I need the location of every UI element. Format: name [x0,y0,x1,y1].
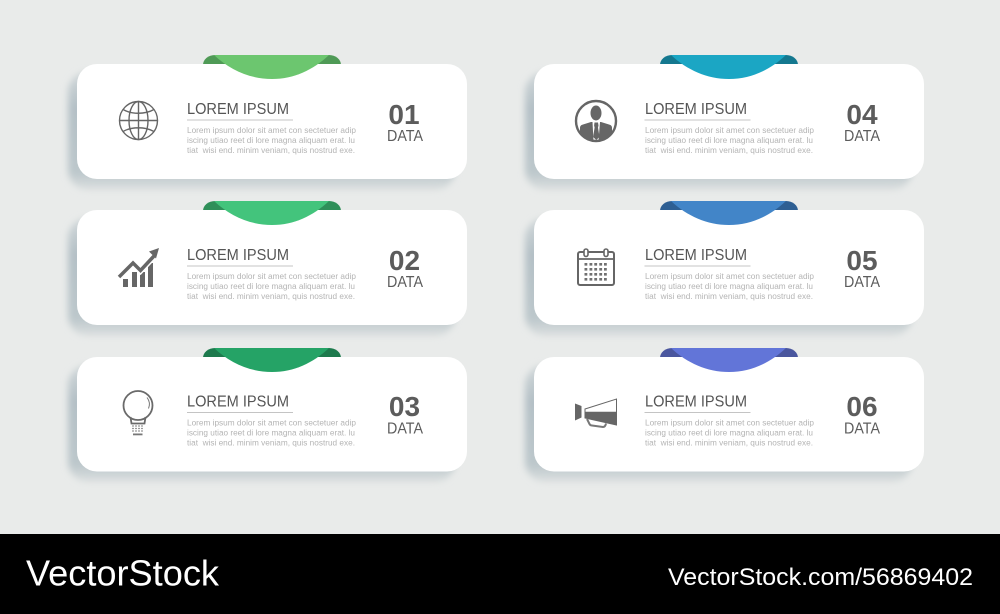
text block [187,125,356,155]
label: DATA [387,420,423,438]
text block [187,271,356,301]
text block: tiat wisi end. minim veniam, quis nostrud exe. [645,438,813,448]
heading: LOREM IPSUM [187,394,289,410]
text block: iscing utiao reet di lore magna aliquam erat. lu [645,428,813,438]
text block: tiat wisi end. minim veniam, quis nostrud exe. [187,145,355,155]
text block [645,125,814,155]
panel: card 02 [68,201,467,336]
text block: Lorem ipsum dolor sit amet con sectetuer adip [187,418,356,428]
text block: tiat wisi end. minim veniam, quis nostrud exe. [187,438,355,448]
text block: Lorem ipsum dolor sit amet con sectetuer adip [187,125,356,135]
text block: iscing utiao reet di lore magna aliquam erat. lu [187,281,355,291]
text block: Lorem ipsum dolor sit amet con sectetuer adip [645,271,814,281]
icon: globe [120,102,158,140]
text block: iscing utiao reet di lore magna aliquam erat. lu [645,135,813,145]
footer bar [0,534,1000,614]
heading: LOREM IPSUM [645,394,747,410]
label: DATA [387,128,423,145]
number: 04 [846,99,878,130]
label: DATA [387,274,423,291]
panel: card 04 [525,55,924,190]
text block [645,271,814,301]
heading: LOREM IPSUM [187,247,289,264]
text block: Lorem ipsum dolor sit amet con sectetuer adip [187,271,356,281]
label: DATA [844,420,880,438]
icon: businessman [576,101,616,141]
text block [645,418,814,448]
icon: megaphone [575,399,616,427]
text block [187,418,356,448]
icon: light bulb [124,391,152,435]
text block: iscing utiao reet di lore magna aliquam erat. lu [187,428,355,438]
number: 01 [388,99,420,130]
text block: tiat wisi end. minim veniam, quis nostrud exe. [187,291,355,301]
text block: tiat wisi end. minim veniam, quis nostrud exe. [645,291,813,301]
text block: tiat wisi end. minim veniam, quis nostrud exe. [645,145,813,155]
heading: LOREM IPSUM [645,247,747,264]
number: 06 [846,391,878,422]
footer logo: VectorStock [26,552,220,594]
heading: LOREM IPSUM [187,101,289,118]
text block: iscing utiao reet di lore magna aliquam erat. lu [187,135,355,145]
number: 05 [846,245,878,276]
number: 03 [389,391,420,422]
panel: card 05 [525,201,924,336]
footer url: VectorStock.com/56869402 [668,564,973,591]
label: DATA [844,128,880,145]
text block: iscing utiao reet di lore magna aliquam erat. lu [645,281,813,291]
panel: card 06 [525,348,924,482]
icon: growth chart [119,248,159,287]
panel: card 03 [68,348,467,482]
label: DATA [844,274,880,291]
heading: LOREM IPSUM [645,101,747,118]
number: 02 [389,245,420,276]
text block: Lorem ipsum dolor sit amet con sectetuer adip [645,418,814,428]
text block: Lorem ipsum dolor sit amet con sectetuer adip [645,125,814,135]
icon: calendar [578,249,614,285]
panel: card 01 [68,55,467,190]
